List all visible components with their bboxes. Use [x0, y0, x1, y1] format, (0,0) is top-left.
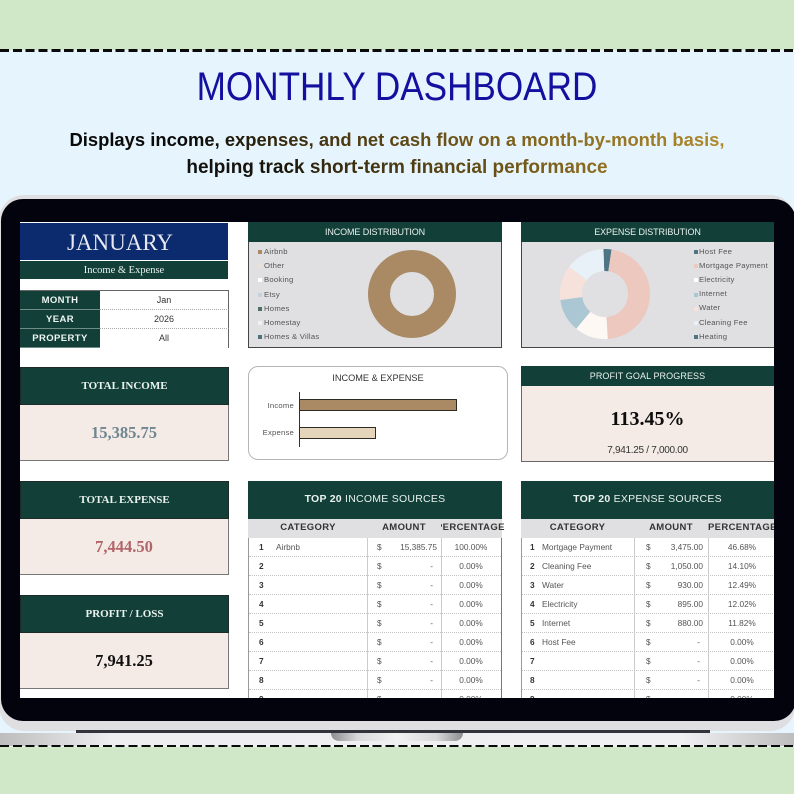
expense table rows: - [697, 656, 700, 666]
filter table: All [159, 333, 169, 343]
expense table rows: 880.00 [678, 618, 703, 628]
laptop silver bezel [0, 195, 794, 731]
expense bar [299, 427, 376, 439]
income table rows: Airbnb [276, 542, 300, 552]
expense legend: Cleaning Fee [699, 318, 748, 327]
income table rows: 7 [259, 656, 264, 666]
income legend: Booking [264, 275, 294, 284]
property filter: PROPERTY [32, 333, 88, 344]
expense table rows: $ [646, 618, 651, 628]
profit loss value [20, 633, 229, 689]
income table rows: 6 [259, 637, 264, 647]
laptop black bezel [1, 199, 794, 721]
total income heading [20, 367, 229, 405]
income table rows: 0.00% [459, 656, 483, 666]
panel: income and expense bar chart [248, 366, 508, 460]
expense table rows [521, 538, 781, 711]
expense table rows: Internet [542, 618, 570, 628]
subtitle: Displays income, expenses, and net cash flow on a month-by-month basis, [69, 129, 725, 150]
month filter [20, 291, 100, 310]
expense distribution heading: EXPENSE DISTRIBUTION [594, 227, 701, 237]
panel: top 20 income sources [248, 481, 505, 698]
expense table rows: 12.49% [728, 580, 756, 590]
expense table rows: $ [646, 599, 651, 609]
expense table rows: 0.00% [730, 675, 754, 685]
income table rows: 0.00% [459, 561, 483, 571]
expense table rows: 4 [530, 599, 535, 609]
income table rows: $ [377, 675, 382, 685]
profit loss heading [20, 595, 229, 633]
income bar [299, 399, 457, 411]
expense table rows: 3,475.00 [671, 542, 703, 552]
income legend [258, 247, 319, 341]
expense table rows: 895.00 [678, 599, 703, 609]
filter table: Jan [157, 295, 171, 305]
total income heading: TOTAL INCOME [81, 380, 168, 392]
profit goal percentage: 113.45% [611, 408, 684, 430]
income table rows: $ [377, 542, 382, 552]
income table rows: $ [377, 580, 382, 590]
expense table rows: Cleaning Fee [542, 561, 591, 571]
expense legend: Host Fee [699, 247, 732, 256]
total income card [20, 367, 229, 461]
total expense card [20, 481, 229, 575]
expense legend: Mortgage Payment [699, 261, 768, 270]
income table rows: 8 [259, 675, 264, 685]
profit goal heading: PROFIT GOAL PROGRESS [590, 371, 705, 381]
income table heading [248, 481, 502, 519]
income table rows: - [430, 561, 433, 571]
income legend: Homes [264, 304, 290, 313]
expense table rows: 14.10% [728, 561, 756, 571]
expense table rows: 2 [530, 561, 535, 571]
income table rows: - [430, 580, 433, 590]
subtitle: helping track short-term financial performance [186, 157, 608, 178]
income table rows: - [430, 637, 433, 647]
expense table rows: 3 [530, 580, 535, 590]
laptop base [0, 733, 794, 746]
bar chart title: INCOME & EXPENSE [332, 373, 424, 383]
panel: income distribution [248, 222, 502, 348]
hinge bar [76, 730, 710, 733]
income distribution heading: INCOME DISTRIBUTION [325, 227, 425, 237]
expense table rows: $ [646, 561, 651, 571]
income table rows: 100.00% [455, 542, 487, 552]
expense table rows: 930.00 [678, 580, 703, 590]
expense table rows: 12.02% [728, 599, 756, 609]
income table rows: 2 [259, 561, 264, 571]
expense table rows: $ [646, 675, 651, 685]
income legend: Airbnb [264, 247, 288, 256]
expense table rows: Host Fee [542, 637, 576, 647]
income table rows [248, 538, 502, 711]
expense legend: Water [699, 303, 720, 312]
income table heading: TOP 20 INCOME SOURCES [305, 493, 445, 505]
expense legend: Electricity [699, 275, 735, 284]
income table rows: 4 [259, 599, 264, 609]
income label: Income [268, 401, 294, 410]
month subtitle [20, 261, 228, 279]
year filter: YEAR [46, 314, 74, 325]
filter table: 2026 [154, 314, 174, 324]
income table rows: $ [377, 599, 382, 609]
month subtitle: Income & Expense [84, 265, 164, 276]
month banner: JANUARY [67, 230, 173, 255]
panel: profit goal progress [521, 366, 774, 462]
panel: top 20 expense sources [521, 481, 774, 698]
expense donut chart [560, 249, 650, 339]
expense distribution heading [521, 222, 774, 242]
income table rows: 0.00% [459, 637, 483, 647]
income table rows: $ [377, 618, 382, 628]
property filter [20, 329, 100, 348]
profit loss value: 7,941.25 [95, 651, 153, 670]
expense table rows: Water [542, 580, 564, 590]
income table rows: 3 [259, 580, 264, 590]
income legend: Homes & Villas [264, 332, 319, 341]
expense table heading: TOP 20 EXPENSE SOURCES [573, 493, 722, 505]
expense table rows: 8 [530, 675, 535, 685]
income table column headers [248, 519, 502, 538]
panel: top 20 expense sources: CATEGORY [550, 522, 605, 533]
month banner fill [20, 223, 228, 260]
expense table rows: $ [646, 656, 651, 666]
expense table column headers [521, 519, 781, 538]
income table rows: 0.00% [459, 580, 483, 590]
expense table rows: 1 [530, 542, 535, 552]
laptop screen [20, 222, 774, 698]
income table rows: 0.00% [459, 675, 483, 685]
expense table rows: Mortgage Payment [542, 542, 612, 552]
total expense heading: TOTAL EXPENSE [79, 494, 170, 506]
income legend: Other [264, 261, 284, 270]
month filter: MONTH [42, 295, 78, 306]
expense table heading [521, 481, 774, 519]
expense table rows: $ [646, 580, 651, 590]
expense table rows: - [697, 637, 700, 647]
expense label: Expense [263, 428, 294, 437]
income table rows: 15,385.75 [400, 542, 437, 552]
profit goal amount: 7,941.25 / 7,000.00 [607, 445, 688, 456]
income legend: Etsy [264, 290, 280, 299]
income table rows: 1 [259, 542, 264, 552]
trackpad notch [331, 733, 463, 741]
panel: expense distribution [521, 222, 774, 348]
expense table rows: 11.82% [728, 618, 756, 628]
axis [299, 392, 300, 447]
profit loss heading: PROFIT / LOSS [85, 608, 164, 620]
expense table rows: 7 [530, 656, 535, 666]
bottom green band [0, 747, 794, 794]
income table rows: - [430, 656, 433, 666]
year filter [20, 310, 100, 329]
income legend: Homestay [264, 318, 301, 327]
expense table rows: 6 [530, 637, 535, 647]
profit loss card [20, 595, 229, 689]
total expense value: 7,444.50 [95, 537, 153, 556]
income table rows: $ [377, 656, 382, 666]
expense table rows: - [697, 675, 700, 685]
top green band [0, 0, 794, 50]
panel: top 20 expense sources: AMOUNT [649, 522, 693, 533]
panel: top 20 income sources: CATEGORY [280, 522, 336, 533]
expense table rows: $ [646, 637, 651, 647]
title: MONTHLY DASHBOARD [197, 65, 597, 109]
expense table rows: Electricity [542, 599, 578, 609]
total income value [20, 405, 229, 461]
total expense value [20, 519, 229, 575]
total expense heading [20, 481, 229, 519]
income table rows: - [430, 675, 433, 685]
expense table rows: 1,050.00 [671, 561, 703, 571]
subtitle [69, 129, 725, 178]
filter table [20, 290, 229, 348]
expense table rows: $ [646, 542, 651, 552]
income table rows: $ [377, 637, 382, 647]
income table rows: - [430, 599, 433, 609]
income table rows: - [430, 618, 433, 628]
income table rows: 0.00% [459, 599, 483, 609]
expense table rows: 0.00% [730, 637, 754, 647]
expense legend: Heating [699, 332, 727, 341]
expense table rows: 0.00% [730, 656, 754, 666]
expense table rows: 46.68% [728, 542, 756, 552]
expense table rows: 5 [530, 618, 535, 628]
income donut chart [368, 250, 456, 338]
panel: top 20 income sources: AMOUNT [382, 522, 426, 533]
expense legend: Internet [699, 289, 727, 298]
income distribution heading [248, 222, 502, 242]
income table rows: $ [377, 561, 382, 571]
profit goal heading [521, 366, 774, 386]
income table rows: 0.00% [459, 618, 483, 628]
income table rows: 5 [259, 618, 264, 628]
expense legend [694, 247, 768, 341]
total income value: 15,385.75 [91, 423, 157, 442]
